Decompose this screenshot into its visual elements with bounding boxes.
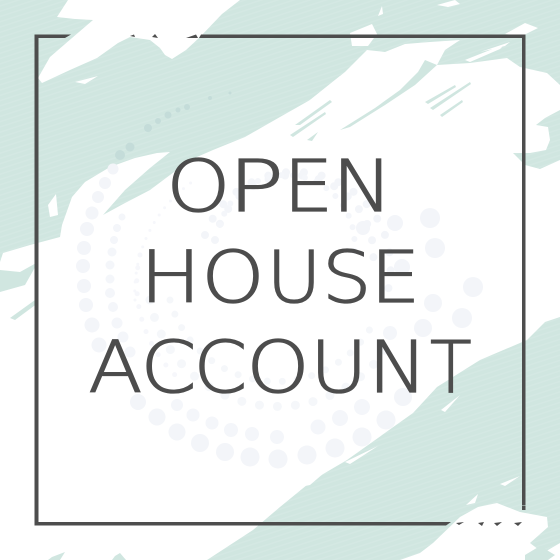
title line: OPEN: P	[228, 145, 284, 228]
title line: HOUSE: E	[370, 236, 420, 319]
title line: ACCOUNT: C	[194, 326, 247, 409]
spiral dot pattern	[76, 92, 483, 468]
inner dotted rings	[135, 172, 391, 406]
title line: ACCOUNT: O	[246, 326, 310, 409]
frame: right side	[522, 34, 526, 506]
title line: OPEN: E	[283, 145, 333, 228]
brush fleck: top edge	[350, 24, 377, 46]
title line: ACCOUNT: T	[430, 326, 472, 409]
frame: left side	[34, 34, 38, 526]
brush flecks: upper band wisps	[300, 42, 510, 108]
brush stroke: top left	[38, 0, 240, 83]
title line: ACCOUNT: C	[140, 326, 196, 409]
frame: top right segment	[199, 34, 526, 38]
frame: right fragment	[522, 506, 526, 510]
outer ring dots	[76, 164, 483, 468]
mint streak: upper middle	[340, 60, 437, 130]
title line: HOUSE: S	[322, 236, 372, 319]
mint wedge: left edge	[0, 262, 38, 292]
title line: ACCOUNT: N	[368, 326, 428, 409]
square frame	[34, 34, 526, 526]
brush fleck: left of stroke	[48, 76, 98, 217]
mint wisp: bottom left	[48, 552, 126, 560]
second ring dots	[105, 214, 397, 444]
dots on mint	[115, 92, 232, 160]
title text	[88, 145, 472, 409]
title line: OPEN: O	[166, 145, 230, 228]
title line: HOUSE: O	[202, 236, 264, 319]
frame: bottom segment	[34, 522, 451, 526]
mint streak: centre wisps	[290, 100, 332, 141]
title line: OPEN: N	[332, 145, 393, 228]
title line: ACCOUNT: U	[310, 326, 368, 409]
brush stroke: lower right	[400, 503, 560, 560]
brush fleck: bottom mint	[300, 395, 520, 505]
brush fleck: top right	[378, 0, 538, 36]
frame: bottom dashes	[456, 522, 522, 526]
title line: ACCOUNT: A	[88, 326, 142, 409]
mint streak: bottom right corner	[525, 546, 555, 560]
title line: HOUSE: H	[140, 236, 201, 319]
mint streak: right wisps	[425, 82, 471, 117]
frame: top gap fragments	[130, 34, 198, 38]
frame: top left segment	[34, 34, 71, 38]
mint wisp: left edge lower	[10, 300, 38, 320]
title line: HOUSE: U	[266, 236, 322, 319]
